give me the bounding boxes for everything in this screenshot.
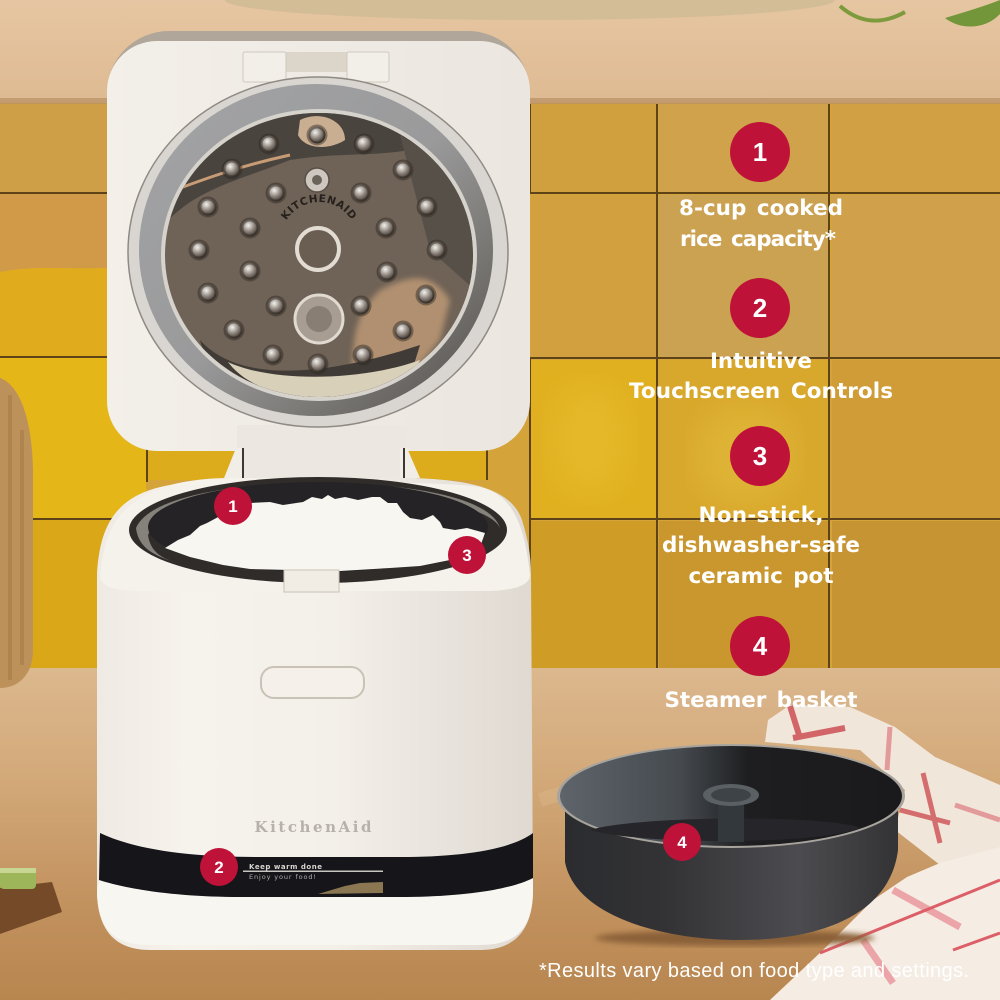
tile wall background xyxy=(0,100,1000,670)
feature 2: controls xyxy=(629,278,893,404)
center ring xyxy=(297,228,339,270)
steam valve xyxy=(305,168,329,192)
lid latch tabs xyxy=(243,52,389,82)
feature 3: pot xyxy=(662,426,860,589)
basket post xyxy=(703,784,759,842)
marker 2 on panel: 2 xyxy=(214,858,224,877)
feature 3: pot: dishwasher-safe xyxy=(662,533,860,558)
steamer basket xyxy=(557,744,905,946)
feature 4: steamer: 4 xyxy=(753,631,768,661)
feature 2: controls: Touchscreen Controls xyxy=(629,379,893,404)
base below panel xyxy=(97,878,533,945)
feature 1: capacity: rice capacity* xyxy=(680,227,836,252)
brand logo: KitchenAid xyxy=(254,818,372,836)
marker 2 on panel xyxy=(200,848,238,886)
brand engraved on lid plate: KITCHENAID xyxy=(280,194,356,220)
cutting board with cucumber xyxy=(0,868,62,934)
touchscreen text xyxy=(243,863,383,894)
marker 3 on pot xyxy=(448,536,486,574)
touchscreen text: Keep warm done xyxy=(249,863,322,871)
wooden counter xyxy=(0,668,1000,1000)
wooden shelf xyxy=(0,0,1000,104)
open lid of rice cooker xyxy=(107,31,530,478)
feature 3: pot: 3 xyxy=(753,441,767,471)
feature 4: steamer xyxy=(664,616,858,713)
marker 4 on basket xyxy=(663,823,701,861)
feature 3: pot: Non-stick, xyxy=(698,503,824,528)
marker 4 on basket: 4 xyxy=(677,833,687,852)
lid gasket ring xyxy=(128,77,508,427)
feature 2: controls: 2 xyxy=(753,293,767,323)
feature 4: steamer: Steamer basket xyxy=(664,688,858,713)
marker 1 on pot xyxy=(214,487,252,525)
marker 3 on pot: 3 xyxy=(462,546,472,565)
cooker body xyxy=(97,477,533,950)
control panel xyxy=(99,833,533,897)
lid hinge xyxy=(224,425,420,479)
feature 3: pot: ceramic pot xyxy=(688,564,834,589)
plate dimples xyxy=(190,126,446,372)
inner pot rim xyxy=(129,477,507,583)
feature 1: capacity: 1 xyxy=(753,137,767,167)
footnote: *Results vary based on food type and settings. xyxy=(539,960,969,982)
feature 2: controls: Intuitive xyxy=(710,349,812,374)
strainer xyxy=(295,295,343,343)
marker 1 on pot: 1 xyxy=(228,497,238,516)
rice xyxy=(165,495,485,571)
wood board left xyxy=(0,378,33,688)
kitchen towel xyxy=(765,705,1000,1000)
feature 1: capacity xyxy=(679,122,843,252)
pot clasp xyxy=(284,570,339,592)
feature 1: capacity: 8-cup cooked xyxy=(679,196,843,221)
touchscreen text: Enjoy your food! xyxy=(249,873,316,881)
steel plate xyxy=(165,113,473,397)
body top shoulder xyxy=(100,482,530,591)
front handle xyxy=(261,667,364,698)
